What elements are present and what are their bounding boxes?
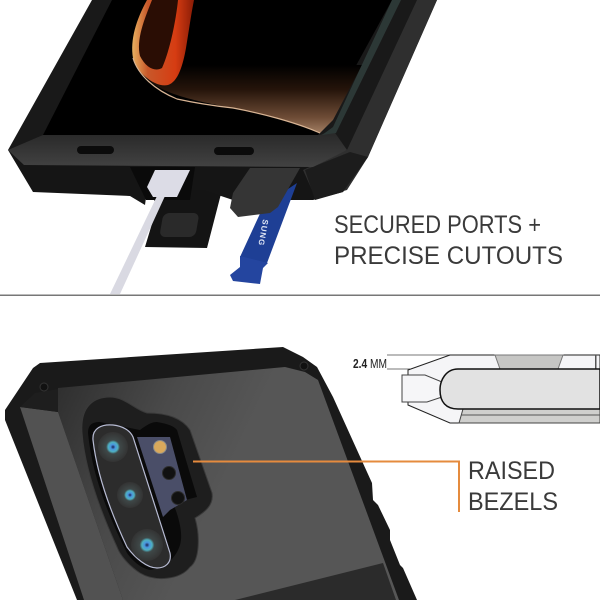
usb port cutout [130,167,195,200]
usb flap [145,190,222,248]
dimension label: 2.4 MM [353,357,387,371]
screw top right [300,362,308,370]
top left chamfer [20,389,58,412]
dimension lines [387,355,600,369]
lens top [98,432,128,462]
rubber port flap [230,168,300,217]
stylus pen [230,183,297,284]
back plate [58,367,399,600]
top insert [495,355,563,369]
caption: raised bezels [468,457,558,516]
zoom detail: bezel cross-section [353,355,600,423]
caption line 2: PRECISE CUTOUTS [334,242,563,270]
flash [154,440,166,454]
caption line 1: SECURED PORTS + [334,211,541,239]
bottom rail [459,409,600,423]
usb plug [147,170,190,197]
phone section [440,369,600,409]
usb cable [110,196,165,294]
screen side edge [322,0,401,135]
phone: bottom view with ports [8,0,437,294]
flame dark core [139,0,178,70]
stylus body [240,183,297,263]
case section [408,355,600,423]
divider [0,294,600,296]
caption line 2: BEZELS [468,488,558,516]
phone: rear view with camera [5,347,417,600]
sensor plate [137,437,187,517]
case lower body [8,140,368,205]
lens middle [117,482,143,508]
stylus lettering: SUNG [256,219,270,247]
side bump [402,375,442,402]
camera bezel [82,397,212,579]
case outer shell [8,0,437,167]
callout line [193,462,459,512]
caption: secured ports [334,211,563,270]
stylus tip [230,256,268,284]
flame wave [132,0,194,85]
case bezel [8,130,347,167]
lens capsule [93,425,170,568]
speaker slot right [214,147,254,155]
sensor top [162,466,176,480]
right side highlight [303,0,437,199]
camera well [88,422,197,570]
lens bottom [131,529,163,561]
case outer [5,347,417,600]
caption line 1: RAISED [468,457,555,485]
screen [43,0,392,135]
wave white edge [133,58,320,133]
bottom panel [235,563,396,600]
screw top left [40,383,48,391]
rail line [461,414,600,416]
sensor bottom [172,492,184,504]
speaker slot left [77,146,114,154]
lower right dark chamfer [305,152,368,200]
screen glow [147,65,362,133]
left chamfer [20,407,123,600]
right seam [595,355,596,369]
